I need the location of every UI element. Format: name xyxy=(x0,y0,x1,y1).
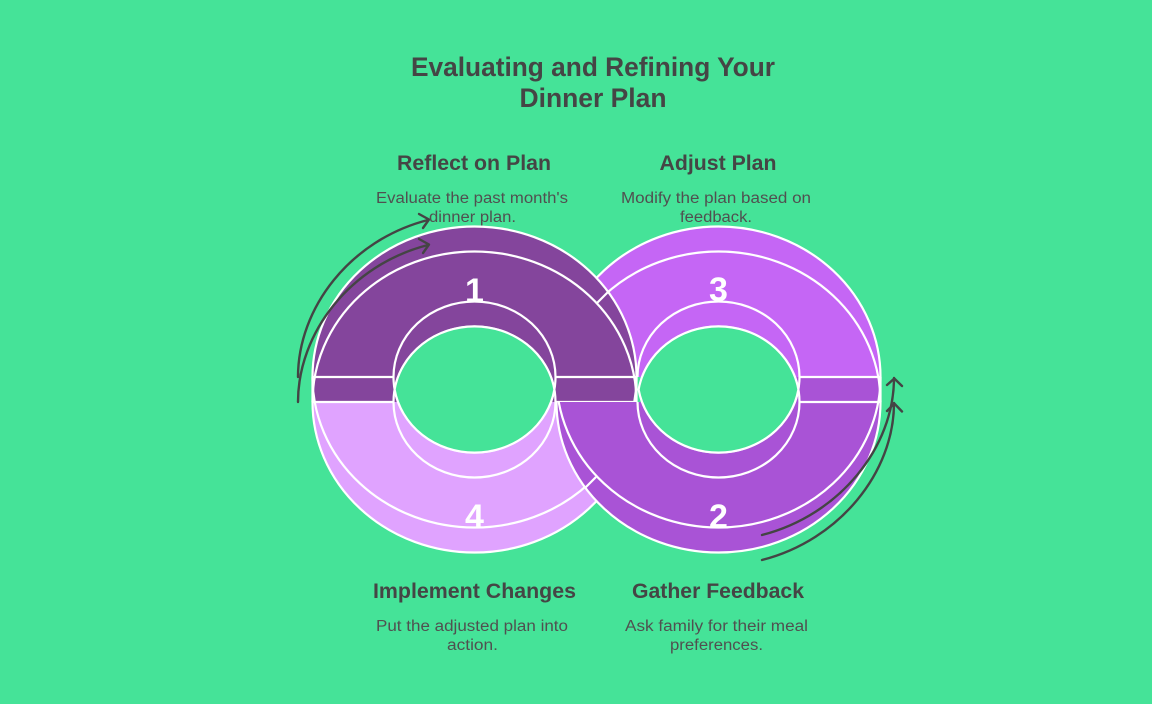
label: implement changes xyxy=(373,580,576,654)
number 1: 1 xyxy=(465,272,484,310)
label: gather feedback: Ask family for their meal xyxy=(625,618,808,635)
segment 3: adjust plan ring xyxy=(596,225,882,377)
label: reflect on plan xyxy=(376,152,568,226)
label: adjust plan: Adjust Plan xyxy=(660,152,776,175)
arrow: outer bottom-right xyxy=(762,403,902,560)
label: gather feedback xyxy=(625,580,808,654)
label: reflect on plan: Evaluate the past month's xyxy=(376,190,568,207)
segment 4: implement changes ring xyxy=(311,402,596,554)
label: implement changes: Put the adjusted plan into xyxy=(376,618,568,635)
label: adjust plan xyxy=(621,152,811,226)
label: adjust plan: Modify the plan based on xyxy=(621,190,811,207)
figure-eight loop diagram xyxy=(312,226,880,552)
number 2: 2 xyxy=(709,498,728,536)
upper crossing edge xyxy=(597,292,608,303)
segment 1: reflect on plan ring xyxy=(311,225,638,404)
infographic canvas xyxy=(296,56,904,654)
right centre hole xyxy=(639,326,798,453)
title: Dinner Plan xyxy=(520,83,666,113)
lower crossing edge xyxy=(585,477,596,488)
label: gather feedback: preferences. xyxy=(670,637,763,654)
arrow: inner top-left xyxy=(298,239,429,402)
title xyxy=(411,52,775,113)
label: reflect on plan: Reflect on Plan xyxy=(397,152,551,175)
segment 2: gather feedback ring xyxy=(556,376,882,554)
label: adjust plan: feedback. xyxy=(680,209,752,226)
arrow: outer top-left xyxy=(298,214,429,377)
label: reflect on plan: dinner plan. xyxy=(429,209,516,226)
arrow: inner bottom-right xyxy=(762,378,902,535)
left centre hole xyxy=(395,326,554,453)
label: implement changes: action. xyxy=(447,637,498,654)
number 4: 4 xyxy=(465,498,484,536)
label: gather feedback: Gather Feedback xyxy=(632,580,804,603)
title: Evaluating and Refining Your xyxy=(411,52,775,82)
label: implement changes: Implement Changes xyxy=(373,580,576,603)
number 3: 3 xyxy=(709,271,728,309)
